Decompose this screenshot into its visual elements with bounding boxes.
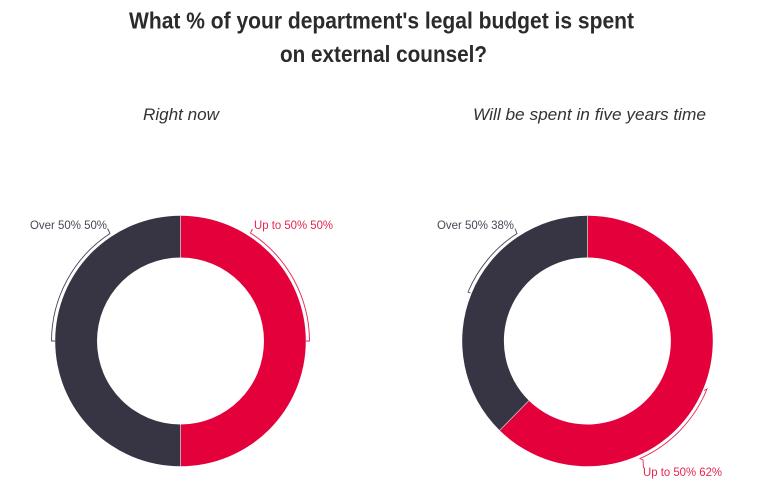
subtitle: five years: Will be spent in five years time (473, 106, 706, 124)
segment divider: split (500, 401, 529, 430)
label: over 50%: Over 50% 50% (30, 218, 107, 232)
segment divider: bottom (180, 424, 182, 466)
bracket: over 50% (468, 228, 517, 293)
title (129, 8, 634, 67)
segment: up to 50% (500, 216, 713, 466)
bracket: up to 50% (250, 229, 310, 341)
title: on external counsel? (280, 41, 487, 67)
subtitle: right now: Right now (143, 106, 220, 124)
label: up to 50%: Up to 50% 62% (643, 465, 722, 479)
donut chart: right now (30, 216, 333, 466)
donut chart: five years (437, 216, 722, 479)
label: over 50%: Over 50% 38% (437, 218, 514, 232)
title: What % of your department's legal budget is spent (129, 8, 634, 34)
segment: up to 50% (180, 216, 306, 466)
segment divider: top (180, 216, 182, 258)
segment: over 50% (55, 216, 181, 466)
segment: over 50% (462, 216, 588, 430)
bracket: over 50% (52, 228, 110, 341)
label: up to 50%: Up to 50% 50% (254, 218, 333, 232)
segment divider: top (586, 216, 588, 258)
bracket: up to 50% (640, 389, 707, 468)
